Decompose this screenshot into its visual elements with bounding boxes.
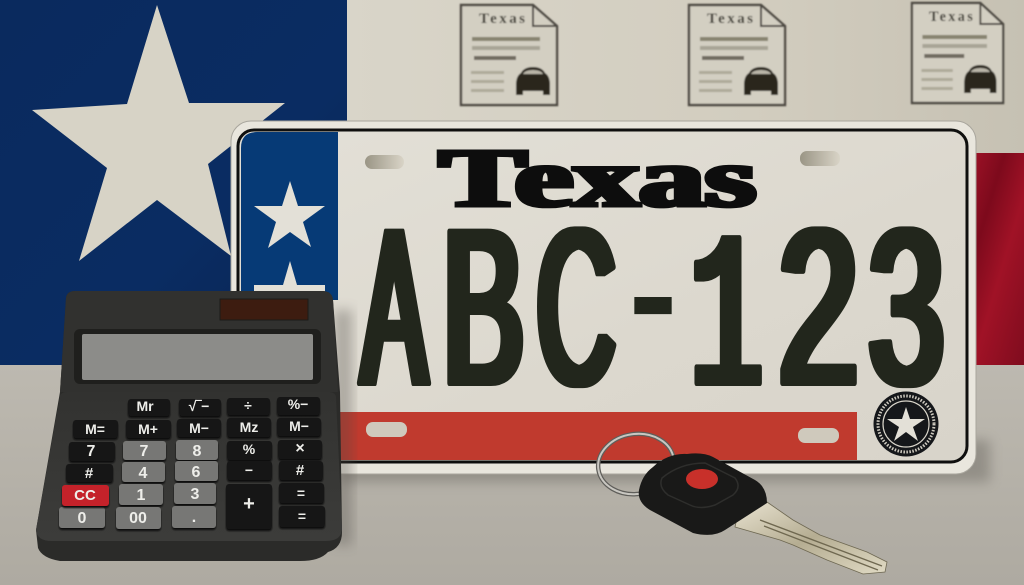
license plate [231, 121, 976, 474]
plate number: B [443, 184, 524, 430]
solar panel [220, 299, 308, 320]
keys: CC [74, 487, 96, 504]
flag: red stripe [960, 153, 1024, 365]
keys: 7 [140, 443, 149, 460]
calculator shadow [334, 310, 352, 545]
icon: document right [912, 3, 1003, 103]
keys: 6 [192, 464, 201, 481]
keys: M+ [138, 421, 158, 437]
icon: document left [461, 5, 557, 105]
seal [874, 392, 938, 456]
heading: Texas: Texas [439, 132, 756, 225]
keys: 1 [137, 487, 146, 504]
plate number: - [633, 165, 673, 411]
keys: %− [288, 396, 308, 412]
table surface [0, 365, 1024, 585]
plate shadow [340, 440, 990, 482]
keys: . [192, 509, 196, 526]
keys: = [298, 508, 306, 524]
plate number: 3 [869, 184, 944, 430]
keys: 7 [87, 443, 96, 460]
icon: document center [689, 5, 785, 105]
red bar [339, 412, 857, 460]
keys: Mz [240, 419, 258, 435]
keys: = [297, 485, 305, 501]
keys: # [85, 465, 94, 482]
display [74, 329, 321, 384]
plate number: 2 [779, 184, 858, 430]
key ring [594, 429, 678, 499]
flag: large star [32, 5, 285, 261]
plate number: C [537, 184, 615, 430]
keys: M− [189, 420, 209, 436]
keys: 0 [78, 510, 87, 527]
keys: 00 [129, 510, 147, 527]
keys: 3 [191, 486, 200, 503]
keys: − [245, 462, 253, 478]
calculator [36, 291, 342, 561]
keys: Mr [136, 398, 154, 414]
metal key blade [735, 502, 887, 574]
keys: 8 [193, 443, 202, 460]
keys: M= [85, 421, 105, 437]
mounting slots [365, 151, 840, 443]
plate number: A [362, 184, 426, 430]
fob body [639, 453, 767, 535]
keys: M− [289, 418, 309, 434]
keys: # [296, 462, 305, 479]
keys: √‾− [189, 398, 209, 414]
flag: blue field [0, 0, 347, 365]
keys: ÷ [244, 397, 252, 413]
keys [59, 396, 325, 529]
keys: 4 [139, 465, 148, 482]
document icons [461, 3, 1003, 105]
plate body [231, 121, 976, 474]
key and fob [594, 429, 887, 574]
keys: × [295, 440, 305, 457]
plate number [362, 165, 944, 450]
keys: + [243, 493, 255, 515]
blue panel with stars [241, 132, 338, 300]
fob button [686, 469, 718, 489]
calculator body [36, 291, 342, 561]
plate number: 1 [691, 201, 762, 450]
flag: white stripe [347, 0, 1024, 154]
keys: % [243, 441, 256, 457]
